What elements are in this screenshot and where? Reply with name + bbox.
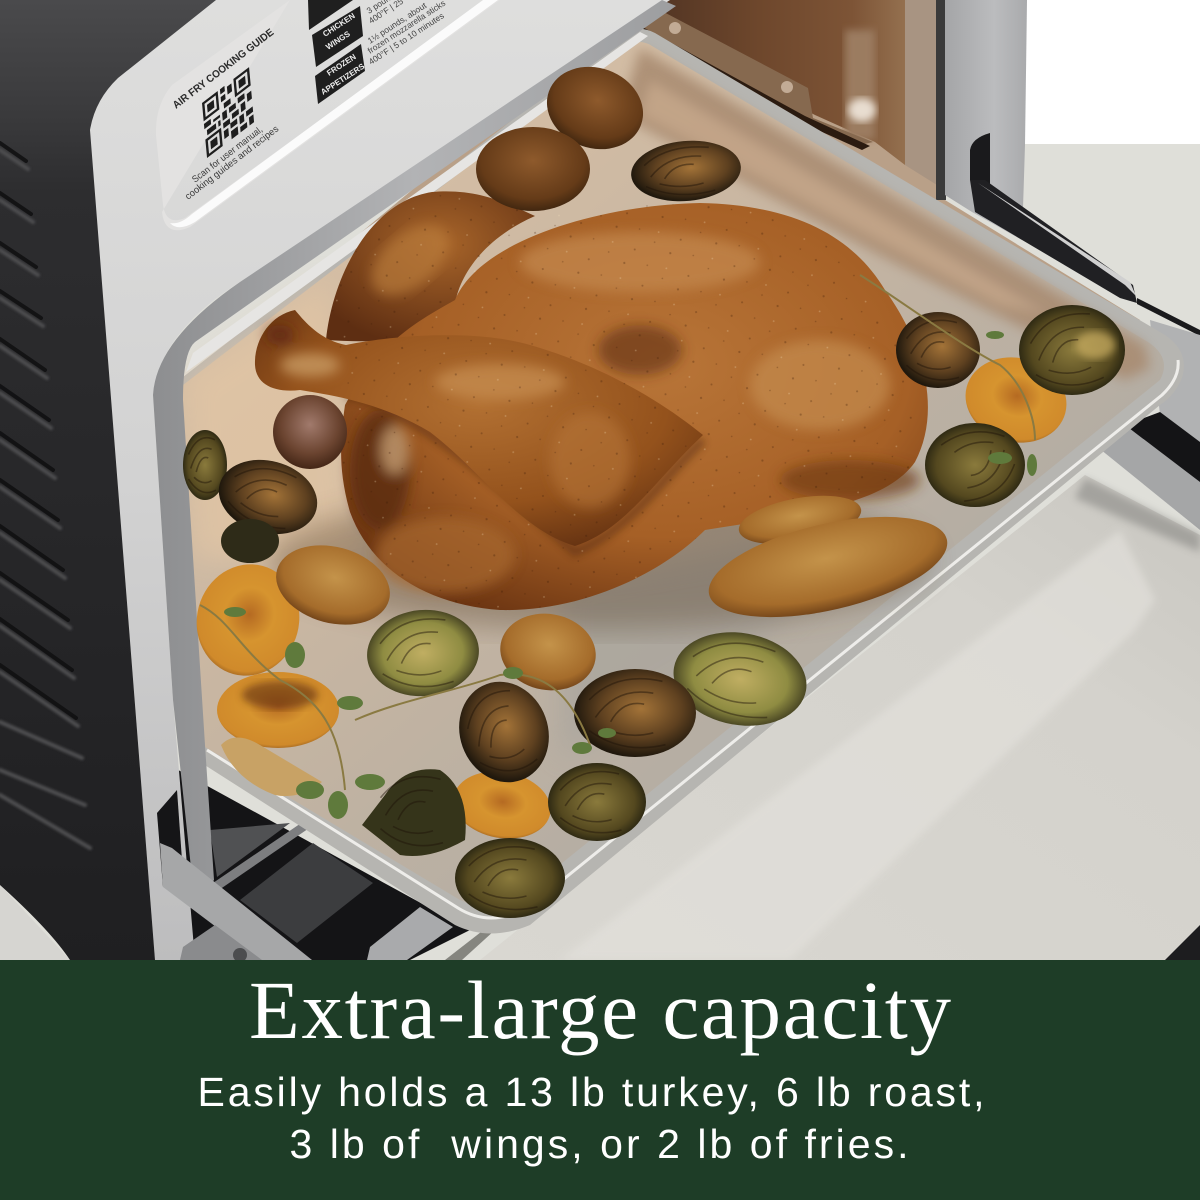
opening rim [153, 0, 676, 905]
dark side of oven with vents [0, 0, 216, 960]
right door hinge and dark rail [1095, 298, 1200, 530]
dark under-tray area [160, 760, 470, 960]
chicken [255, 191, 928, 610]
background counter [0, 0, 1200, 960]
thyme sprigs [200, 275, 1037, 819]
potatoes [184, 54, 1076, 846]
panel sticker: air fry cooking guide [171, 26, 281, 202]
label: frozen appetizers [315, 44, 367, 104]
mesh dots [445, 925, 495, 960]
label: frozen appetizers: APPETIZERS [319, 61, 367, 97]
silver front panel [90, 0, 676, 960]
subtitle line 1: Easily holds a 13 lb turkey, 6 lb roast, [198, 1069, 984, 1115]
oven rail [637, 10, 873, 150]
label text lines: 1½ pounds, about [366, 0, 429, 46]
tray warm wall reflection [620, 48, 1150, 380]
chicken skin specks [326, 191, 917, 610]
white wall top right [1025, 0, 1200, 144]
chicken drumstick [255, 310, 703, 546]
drumstick shadow [346, 395, 703, 552]
guide title: AIR FRY COOKING GUIDE [171, 26, 276, 111]
subtitle line 2: 3 lb of wings, or 2 lb of fries. [290, 1121, 908, 1167]
chicken rear leg [326, 191, 535, 341]
label: chicken wings [312, 6, 363, 67]
door glass [480, 475, 1200, 960]
QR code [202, 67, 254, 158]
bottom banner [0, 960, 1200, 1200]
chicken highlights [350, 232, 920, 593]
label: chicken wings: WINGS [324, 29, 352, 52]
heading: Extra-large capacity [249, 964, 952, 1056]
scan caption: cooking guides and recipes [183, 123, 281, 202]
vents: lighter lips [0, 150, 90, 848]
bottom left counter [0, 885, 70, 960]
oven interior [160, 0, 1140, 500]
sticker highlight [156, 0, 500, 230]
label: bake [308, 0, 353, 30]
tray [160, 29, 1184, 933]
chicken breast [341, 203, 928, 610]
brussels sprouts [183, 136, 1125, 918]
vents: dark slots [0, 143, 76, 718]
hinge strip [157, 790, 312, 962]
label text lines: 400°F | 5 to 10 minutes [367, 10, 446, 67]
food shadow [270, 490, 930, 630]
label: frozen appetizers: FROZEN [325, 52, 358, 78]
label: chicken wings: CHICKEN [321, 11, 357, 39]
scan caption: Scan for user manual, [190, 124, 265, 185]
oven right frame [936, 0, 1137, 303]
food labels [308, 0, 447, 104]
